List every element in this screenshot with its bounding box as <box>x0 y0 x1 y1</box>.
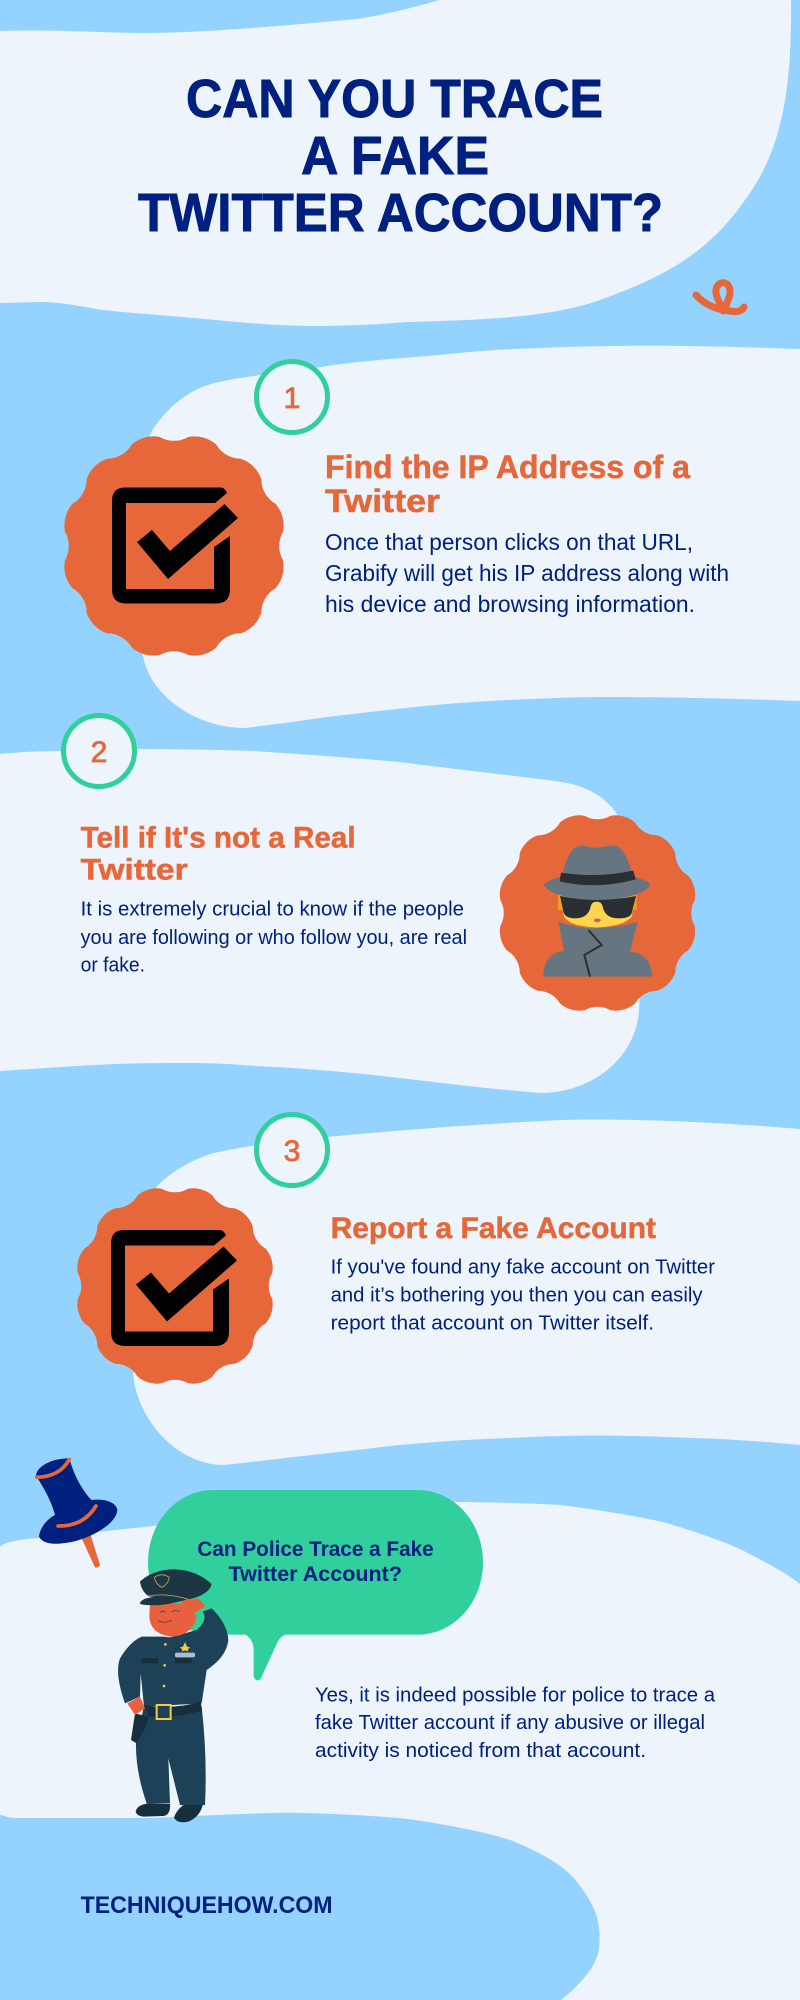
icon: step 1 checkbox badge <box>64 436 284 656</box>
text: step 1 body: Once that person clicks on that URL, <box>325 529 693 555</box>
panel: step 1 background <box>135 346 800 728</box>
heading: step 2 <box>81 822 356 886</box>
text: police answer <box>315 1685 716 1762</box>
step 3 number circle <box>256 1114 328 1186</box>
title <box>138 69 663 243</box>
title: A FAKE <box>301 126 489 186</box>
panel: police section background <box>0 1502 800 2000</box>
text: step 2 body: or fake. <box>81 954 145 976</box>
footer: website: TECHNIQUEHOW.COM <box>81 1892 333 1919</box>
text: step 1 body: his device and browsing information. <box>325 591 695 617</box>
heading: step 2: Twitter <box>81 854 188 886</box>
text: police answer: activity is noticed from that account. <box>315 1740 646 1762</box>
panel: step 2 background <box>0 749 640 1093</box>
text: step 3 body: If you've found any fake account on Twitter <box>331 1256 715 1279</box>
panel: step 3 background <box>132 1120 800 1465</box>
text: step 2 body: It is extremely crucial to know if the people <box>81 898 464 920</box>
text: police answer: fake Twitter account if any abusive or illegal <box>315 1712 705 1734</box>
panel: title background <box>0 0 791 326</box>
text: police answer: Yes, it is indeed possible for police to trace a <box>315 1685 716 1707</box>
step 1 number circle: 1 <box>284 382 300 415</box>
text: step 2 body <box>81 898 467 976</box>
text: step 1 body <box>325 529 729 617</box>
callout: speech bubble: Can Police Trace a Fake <box>197 1538 434 1561</box>
step 2 number circle: 2 <box>91 736 107 769</box>
panel: footer blob <box>0 1813 600 2000</box>
heading: step 1 <box>325 449 690 519</box>
callout: speech bubble <box>148 1490 483 1680</box>
step 3 number circle: 3 <box>284 1135 300 1168</box>
heading: step 1: Find the IP Address of a <box>325 449 690 485</box>
icon: police officer <box>118 1569 228 1822</box>
heading: step 2: Tell if It's not a Real <box>81 822 356 854</box>
title: TWITTER ACCOUNT? <box>138 183 663 243</box>
text: step 1 body: Grabify will get his IP address along with <box>325 560 729 586</box>
icon: orange squiggle <box>696 283 744 312</box>
text: step 3 body <box>331 1256 715 1335</box>
text: step 2 body: you are following or who follow you, are real <box>81 926 467 949</box>
callout: speech bubble: Twitter Account? <box>229 1563 402 1586</box>
step 2 number circle <box>64 716 134 786</box>
icon: step 3 checkbox badge <box>77 1188 273 1384</box>
heading: step 1: Twitter <box>325 483 440 519</box>
text: step 3 body: and it’s bothering you then you can easily <box>331 1284 703 1307</box>
text: step 3 body: report that account on Twitter itself. <box>331 1312 654 1335</box>
heading: step 3: Report a Fake Account <box>331 1212 656 1245</box>
icon: push pin <box>36 1458 117 1568</box>
step 1 number circle <box>256 362 328 432</box>
title: CAN YOU TRACE <box>186 69 603 129</box>
icon: detective badge <box>500 815 695 1011</box>
